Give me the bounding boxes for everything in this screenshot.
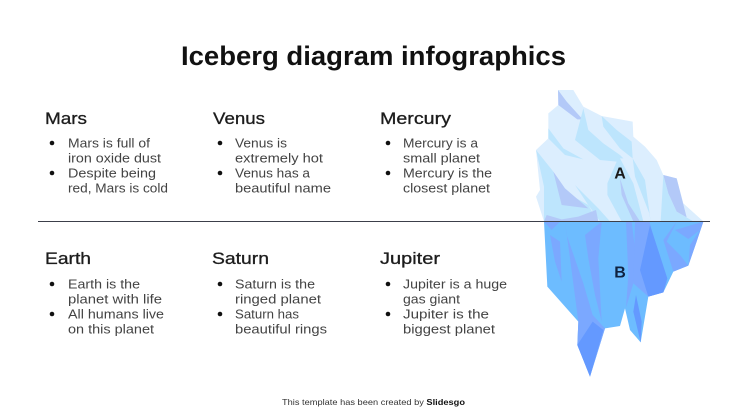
panel: Earth	[45, 250, 164, 336]
bullet list: Mercury: small planet	[403, 152, 481, 166]
bullet list: Mars	[50, 136, 168, 196]
bullet list: Venus: Venus is	[235, 136, 287, 150]
bullet list: Mercury	[386, 136, 492, 196]
heading: Earth: Earth	[45, 250, 91, 268]
bullet list: Jupiter: gas giant	[403, 292, 461, 306]
bullet list: Saturn: Saturn has	[235, 308, 299, 322]
bullet list: Mercury: closest planet	[403, 182, 491, 196]
bullet list: Venus	[218, 136, 331, 196]
label: A: A	[614, 166, 626, 182]
bullet list: Mars: iron oxide dust	[68, 152, 162, 166]
bullet list: Saturn: Saturn is the	[235, 278, 315, 292]
bullet list: Earth	[50, 278, 164, 336]
bullet list: Mars: Despite being	[68, 166, 156, 180]
footer credit: This template has been created by Slidesgo	[282, 397, 465, 407]
bullet list: Earth: planet with life	[68, 292, 162, 306]
title: Iceberg diagram infographics	[181, 41, 566, 71]
heading: Saturn: Saturn	[212, 250, 269, 268]
bullet list: Jupiter: Jupiter is a huge	[403, 278, 507, 292]
waterline	[38, 220, 710, 222]
bullet list: Mars: Mars is full of	[68, 136, 151, 150]
heading: Venus: Venus	[213, 110, 265, 128]
bullet list: Saturn: ringed planet	[235, 292, 322, 306]
bullet list: Mercury: Mercury is a	[403, 136, 478, 150]
bullet list: Venus: extremely hot	[235, 152, 324, 166]
bullet list: Earth: Earth is the	[68, 278, 140, 292]
panel: Mercury	[380, 110, 492, 196]
panel: Jupiter	[380, 250, 507, 336]
heading: Mars: Mars	[45, 110, 87, 128]
bullet list: Jupiter: Jupiter is the	[403, 308, 489, 322]
panel: Saturn	[212, 250, 327, 336]
iceberg: under water	[544, 222, 703, 377]
bullet list: Jupiter: biggest planet	[403, 322, 496, 336]
bullet list: Earth: on this planet	[68, 322, 155, 336]
panel: Mars	[45, 110, 168, 196]
bullet list: Mercury: Mercury is the	[403, 166, 492, 180]
bullet list: Saturn: beautiful rings	[235, 322, 327, 336]
panel: Venus	[213, 110, 331, 196]
bullet list: Earth: All humans live	[68, 308, 164, 322]
label: B: B	[614, 264, 626, 282]
bullet list: Jupiter	[386, 278, 507, 336]
bullet list: Saturn	[218, 278, 327, 336]
heading: Mercury: Mercury	[380, 110, 452, 128]
bullet list: Mars: red, Mars is cold	[68, 182, 168, 196]
bullet list: Venus: beautiful name	[235, 182, 331, 196]
heading: Jupiter: Jupiter	[380, 250, 441, 268]
iceberg: above water	[536, 90, 703, 221]
bullet list: Venus: Venus has a	[235, 166, 310, 180]
